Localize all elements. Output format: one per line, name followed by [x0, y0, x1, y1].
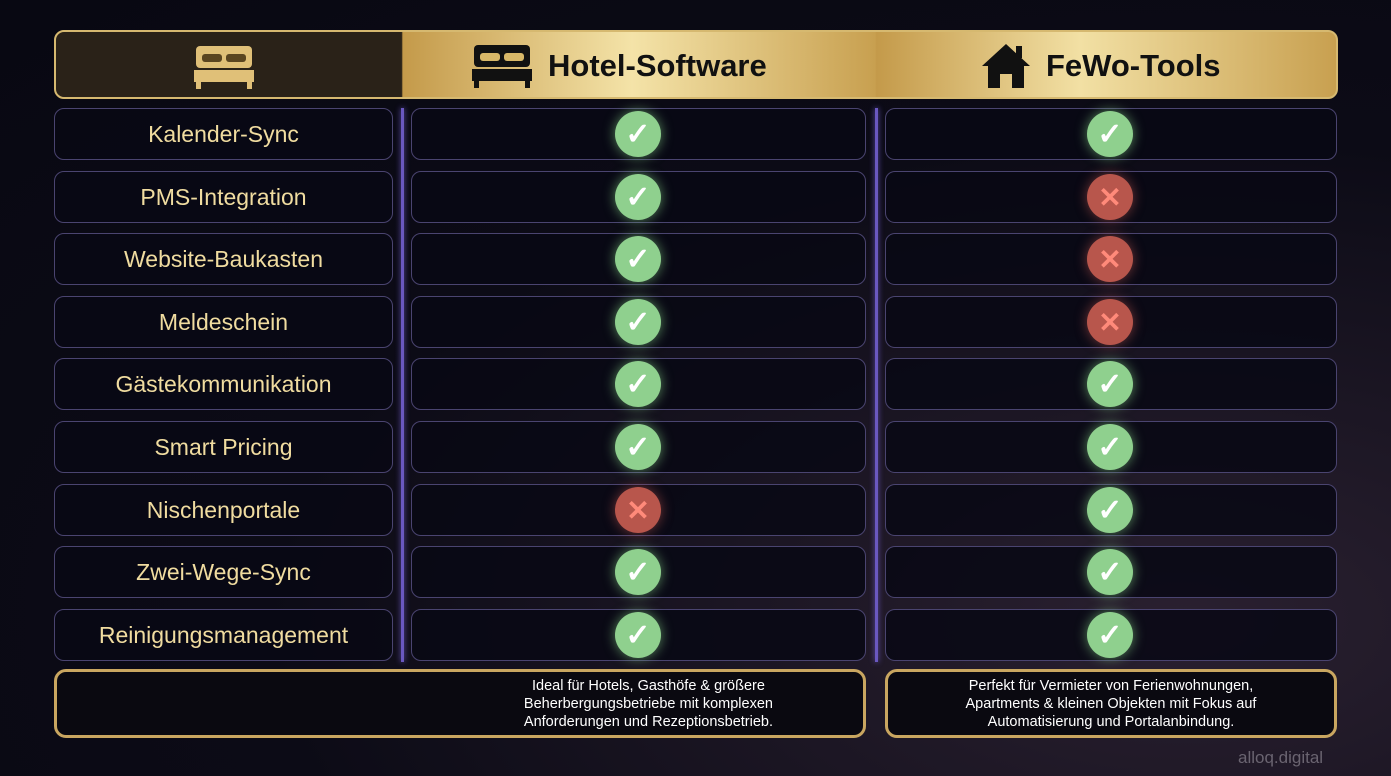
row: Kalender-Sync: ✓ [625, 118, 651, 150]
row: Website-Baukasten: Website-Baukasten [124, 246, 323, 272]
row: PMS-Integration: ✓ [625, 180, 651, 214]
footer: hotel description: Anforderungen und Rezeptionsbetrieb. [524, 714, 773, 730]
heading: FeWo-Tools: FeWo-Tools [1046, 48, 1220, 83]
row: Website-Baukasten [54, 228, 1337, 290]
row: Nischenportale: ✓ [1097, 494, 1123, 526]
icon: bed gold [194, 46, 254, 89]
row: Kalender-Sync: Kalender-Sync [148, 120, 299, 146]
row: Reinigungsmanagement [54, 604, 1337, 666]
footer: fewo description: Perfekt für Vermieter von Ferienwohnungen, [969, 678, 1253, 694]
row: Zwei-Wege-Sync: Zwei-Wege-Sync [136, 558, 311, 584]
row: Reinigungsmanagement: ✓ [1097, 618, 1123, 652]
row: Nischenportale: Nischenportale [147, 496, 300, 522]
row: Nischenportale: ✕ [626, 494, 650, 526]
watermark: alloq.digital [1238, 748, 1323, 767]
row: Gästekommunikation: Gästekommunikation [115, 370, 332, 396]
row: Website-Baukasten: ✓ [625, 242, 651, 276]
row: Zwei-Wege-Sync: ✓ [1097, 556, 1123, 588]
row: PMS-Integration: PMS-Integration [140, 184, 307, 210]
row: Gästekommunikation: ✓ [625, 368, 651, 400]
row: Kalender-Sync [54, 103, 1337, 165]
footer: fewo description: Apartments & kleinen Objekten mit Fokus auf [966, 696, 1256, 712]
row: Gästekommunikation: ✓ [1097, 368, 1123, 400]
header bar [54, 30, 1338, 99]
heading: Hotel-Software: Hotel-Software [548, 48, 767, 83]
heading: Hotel-Software [472, 45, 767, 88]
row: Nischenportale [54, 480, 1337, 540]
row: Website-Baukasten: ✕ [1098, 244, 1122, 274]
row: Zwei-Wege-Sync [54, 541, 1337, 603]
row: PMS-Integration [54, 166, 1337, 228]
row: Smart Pricing [54, 416, 1337, 478]
row: Zwei-Wege-Sync: ✓ [625, 556, 651, 588]
row: Meldeschein: ✓ [625, 306, 651, 338]
footer: hotel description: Beherbergungsbetriebe mit komplexen [524, 696, 773, 712]
row: Meldeschein: ✕ [1098, 306, 1122, 338]
row: Kalender-Sync: ✓ [1097, 118, 1123, 150]
row: Reinigungsmanagement: Reinigungsmanagement [99, 622, 348, 648]
footer: hotel description: Ideal für Hotels, Gasthöfe & größere [532, 678, 765, 694]
heading: FeWo-Tools [982, 44, 1220, 88]
row: Smart Pricing: Smart Pricing [154, 434, 293, 460]
footer: fewo description: Automatisierung und Portalanbindung. [988, 714, 1234, 730]
row: Meldeschein [54, 291, 1337, 353]
row: Meldeschein: Meldeschein [159, 308, 288, 334]
footer: fewo description [885, 669, 1337, 738]
row: Smart Pricing: ✓ [1097, 430, 1123, 464]
footer: hotel description [54, 669, 866, 738]
row: Gästekommunikation [54, 353, 1337, 415]
row: Smart Pricing: ✓ [625, 430, 651, 464]
row: Reinigungsmanagement: ✓ [625, 618, 651, 652]
row: PMS-Integration: ✕ [1098, 182, 1122, 212]
